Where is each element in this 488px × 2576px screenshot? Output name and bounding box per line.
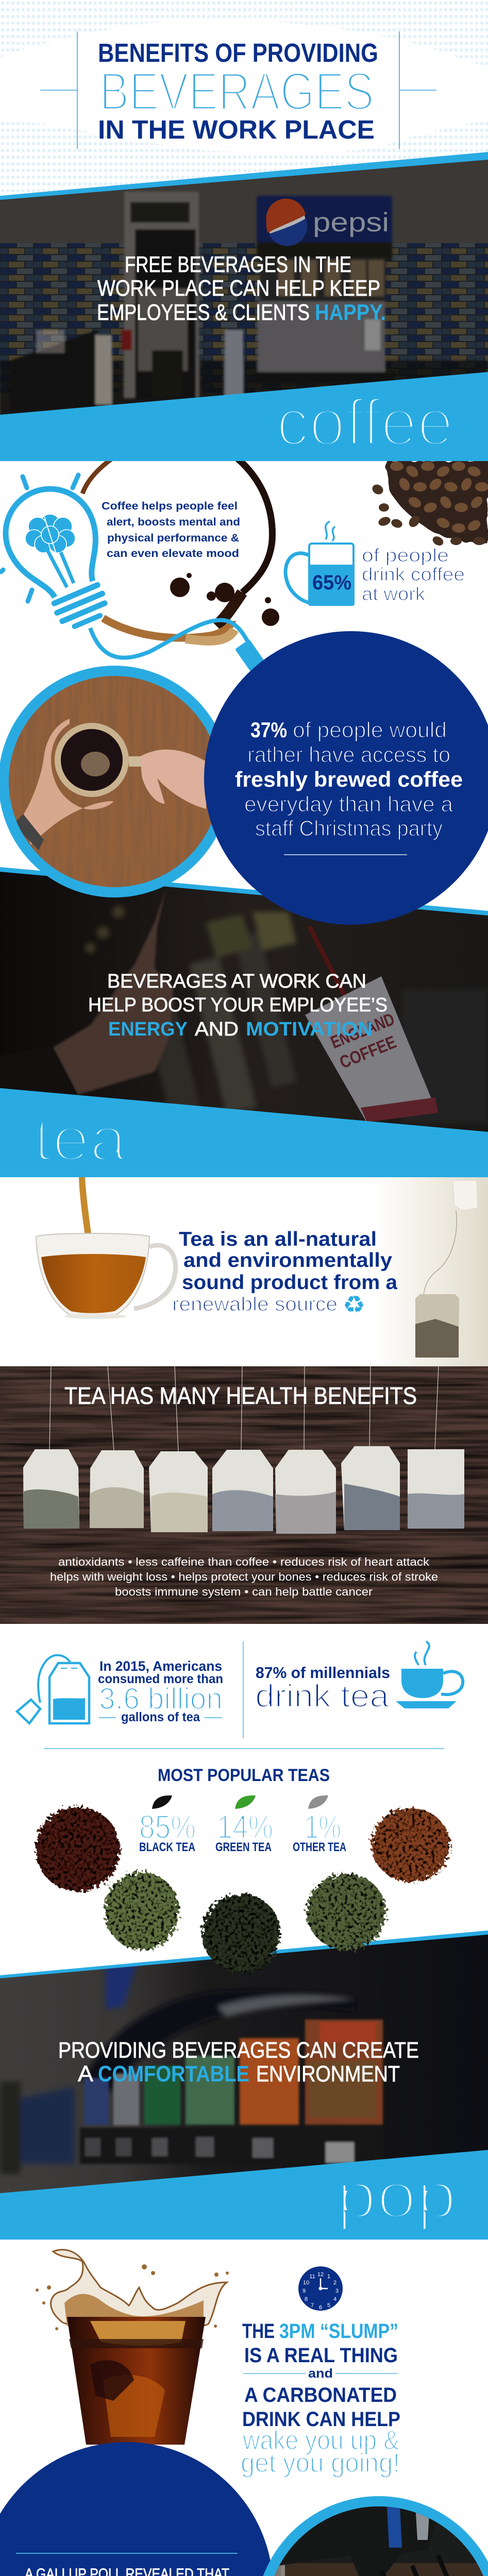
photo circle: pepsi cup fill bbox=[255, 2496, 488, 2576]
text: tea is all natural: renewable source bbox=[172, 1294, 338, 1315]
text: tea is all natural bbox=[172, 1228, 397, 1318]
list: tea benefits: antioxidants • less caffeine than coffee • reduces risk of heart attack bbox=[58, 1555, 430, 1568]
photo: coffee cup bbox=[305, 976, 438, 1122]
title frame lines bbox=[40, 31, 436, 149]
text: coffee benefits: alert, boosts mental and bbox=[107, 516, 240, 528]
hero text bbox=[97, 252, 386, 325]
title line 3: IN THE WORK PLACE bbox=[98, 115, 375, 144]
hero text: WORK PLACE CAN HELP KEEP bbox=[97, 276, 380, 301]
photo: cup bbox=[55, 723, 129, 797]
bulb rays bbox=[1, 475, 78, 601]
hero text: HAPPY. bbox=[315, 300, 386, 325]
navy circle: 37% statistic: 37% bbox=[250, 718, 287, 742]
list: tea benefits: helps with weight loss • helps protect your bones • reduces risk of stroke bbox=[50, 1570, 438, 1583]
hero photo: beverage station bbox=[0, 152, 488, 422]
popular teas: other tea bbox=[293, 1795, 346, 1854]
list: tea benefits bbox=[50, 1555, 438, 1598]
icon: green leaf bbox=[235, 1795, 256, 1809]
stat: 87% of millennials: drink tea bbox=[255, 1679, 390, 1714]
icon: clock at 3pm bbox=[298, 2266, 343, 2311]
section text bbox=[88, 971, 388, 1040]
icon: recycle: ♻ bbox=[343, 1291, 365, 1318]
popular teas: black tea: 85% bbox=[139, 1808, 196, 1845]
navy circle: 37% statistic: freshly brewed coffee bbox=[235, 767, 463, 791]
text: tea is all natural: sound product from a bbox=[182, 1272, 397, 1294]
text: coffee benefits: can even elevate mood bbox=[107, 548, 239, 560]
popular teas: green tea: GREEN TEA bbox=[215, 1840, 272, 1854]
heading: most popular teas: MOST POPULAR TEAS bbox=[158, 1766, 330, 1785]
icon: clock at 3pm: 10 bbox=[303, 2280, 309, 2286]
text: 3pm slump: DRINK CAN HELP bbox=[242, 2408, 400, 2431]
stat: 87% of millennials bbox=[255, 1641, 463, 1714]
stat: 65% mug: drink coffee bbox=[362, 564, 465, 585]
icon: clock at 3pm: 12 bbox=[317, 2272, 324, 2278]
popular teas: other tea: OTHER TEA bbox=[293, 1840, 346, 1854]
section banner: pop: pop bbox=[336, 2160, 457, 2231]
section text: ENERGY bbox=[108, 1019, 188, 1040]
popular teas: green tea: 14% bbox=[217, 1808, 273, 1845]
icon: clock at 3pm: 4 bbox=[333, 2296, 336, 2302]
stat: 3.6 billion gallons: gallons of tea bbox=[121, 1710, 200, 1724]
popular teas: other tea: 1% bbox=[305, 1808, 341, 1845]
hero text: EMPLOYEES & CLIENTS bbox=[97, 300, 310, 325]
tea bag photo: right bbox=[374, 1177, 488, 1366]
icon: tea cup bbox=[396, 1641, 463, 1708]
section text: PROVIDING BEVERAGES CAN CREATE bbox=[58, 2038, 419, 2063]
popular teas: green tea bbox=[215, 1795, 273, 1854]
section text: A bbox=[78, 2061, 94, 2087]
section photo: beverages at work bbox=[0, 866, 488, 1144]
text: tea is all natural: and environmentally bbox=[183, 1249, 392, 1272]
photo: coffee cup: ENGLAND bbox=[328, 1009, 397, 1053]
photo: pepsi wordmark: pepsi bbox=[313, 208, 389, 238]
photo: hand bbox=[53, 890, 173, 1095]
section banner: tea bbox=[0, 1088, 488, 1177]
icon: mug bbox=[285, 521, 355, 606]
title line 1: BENEFITS OF PROVIDING bbox=[98, 38, 378, 67]
popular teas: black tea: BLACK TEA bbox=[139, 1840, 195, 1854]
splash bbox=[36, 2250, 229, 2330]
icon: gray leaf bbox=[308, 1795, 328, 1809]
cord and plug bbox=[90, 620, 267, 674]
heading: tea health benefits: TEA HAS MANY HEALTH BENEFITS bbox=[64, 1382, 417, 1409]
section text: COMFORTABLE bbox=[98, 2061, 249, 2087]
stat: 65% mug: at work bbox=[362, 583, 426, 604]
icon: clock at 3pm: 7 bbox=[311, 2302, 314, 2309]
section text: MOTIVATION bbox=[246, 1019, 373, 1040]
icon: coffee beans bbox=[371, 461, 488, 547]
photo: right hand bbox=[140, 750, 206, 809]
stat: 3.6 billion gallons: consumed more than bbox=[98, 1672, 223, 1686]
icon: clock at 3pm: 5 bbox=[327, 2302, 330, 2309]
stat: 65% mug bbox=[285, 521, 465, 606]
section banner: coffee: coffee bbox=[276, 386, 453, 460]
icon: clock at 3pm: 2 bbox=[333, 2280, 336, 2286]
text: 3pm slump bbox=[241, 2320, 400, 2478]
icon: clock at 3pm: 9 bbox=[302, 2288, 306, 2294]
background dot pattern bbox=[0, 0, 488, 206]
text: coffee benefits bbox=[102, 500, 240, 560]
title bbox=[40, 31, 436, 149]
section photo: soda dispenser bbox=[0, 1929, 488, 2202]
section text: AND bbox=[195, 1019, 239, 1040]
photos: loose tea piles bbox=[36, 1807, 450, 1972]
photo: coffee cup: COFFEE bbox=[337, 1032, 399, 1073]
stat: 3.6 billion gallons: 3.6 billion bbox=[99, 1682, 223, 1716]
text: 3pm slump: A CARBONATED bbox=[244, 2384, 397, 2406]
photo: cola glass with splash bbox=[36, 2250, 229, 2445]
divider lines bbox=[44, 1641, 444, 1749]
photo circle: hands holding coffee bbox=[0, 666, 232, 902]
navy circle: 37% statistic: staff Christmas party bbox=[255, 816, 443, 840]
photo: pepsi logo bbox=[266, 198, 307, 246]
tea bag strings bbox=[49, 1366, 439, 1452]
coffee ring stain bbox=[82, 456, 279, 641]
icon: tea bag bbox=[17, 1655, 89, 1723]
text: 3pm slump: wake you up & bbox=[242, 2426, 399, 2455]
text: coffee benefits: physical performance & bbox=[107, 532, 239, 544]
section banner: pop bbox=[0, 2150, 488, 2240]
stat: 3.6 billion gallons bbox=[17, 1655, 223, 1724]
icon: clock at 3pm: 1 bbox=[327, 2274, 330, 2280]
brain bbox=[25, 514, 75, 553]
stat: 65% mug: 65% bbox=[312, 571, 351, 594]
section text: HELP BOOST YOUR EMPLOYEE’S bbox=[88, 994, 388, 1016]
navy circle: 37% statistic: rather have access to bbox=[247, 742, 450, 767]
stat: 87% of millennials: 87% of millennials bbox=[256, 1664, 390, 1682]
text: tea is all natural: Tea is an all-natural bbox=[179, 1228, 377, 1250]
photo: wood panel with tea bags bbox=[0, 1366, 488, 1624]
photo: tea pouring into glass cup bbox=[36, 1177, 176, 1319]
text: coffee benefits: Coffee helps people feel bbox=[102, 500, 238, 512]
navy circle: 37% statistic: everyday than have a bbox=[244, 792, 453, 816]
icon: clock at 3pm: 11 bbox=[309, 2274, 315, 2280]
navy circle: 37% statistic bbox=[204, 631, 488, 925]
tea bags bbox=[23, 1446, 464, 1534]
text: 3pm slump: IS A REAL THING bbox=[244, 2344, 398, 2367]
text: 3pm slump: 3PM “SLUMP” bbox=[279, 2320, 398, 2343]
text: 3pm slump: get you going! bbox=[241, 2448, 400, 2478]
section banner: coffee bbox=[0, 372, 488, 461]
list: tea benefits: boosts immune system • can help battle cancer bbox=[115, 1585, 373, 1598]
navy circle: gallup poll bbox=[0, 2442, 273, 2576]
text: 3pm slump: THE bbox=[242, 2320, 275, 2343]
text: 3pm slump: and bbox=[308, 2366, 333, 2381]
stat: 3.6 billion gallons: In 2015, Americans bbox=[99, 1658, 222, 1674]
icon: black leaf bbox=[152, 1795, 172, 1809]
photo: left hand bbox=[21, 719, 113, 845]
icon: clock at 3pm: 3 bbox=[335, 2288, 339, 2294]
section text: ENVIRONMENT bbox=[256, 2061, 400, 2087]
title line 2: BEVERAGES bbox=[99, 62, 374, 122]
photo: drink panels bbox=[80, 2020, 384, 2164]
popular teas: black tea bbox=[139, 1795, 196, 1854]
section text: BEVERAGES AT WORK CAN bbox=[107, 971, 366, 992]
icon: light bulb with brain bbox=[0, 475, 129, 640]
icon: clock at 3pm: 8 bbox=[305, 2296, 308, 2302]
icon: clock at 3pm: 6 bbox=[319, 2304, 322, 2311]
section text bbox=[58, 2038, 419, 2087]
stat: 65% mug: of people bbox=[362, 545, 449, 566]
navy circle: 37% statistic: of people would bbox=[293, 718, 447, 742]
bulb outline and base bbox=[0, 475, 129, 640]
hero text: FREE BEVERAGES IN THE bbox=[125, 252, 351, 277]
section banner: tea: tea bbox=[33, 1105, 127, 1174]
